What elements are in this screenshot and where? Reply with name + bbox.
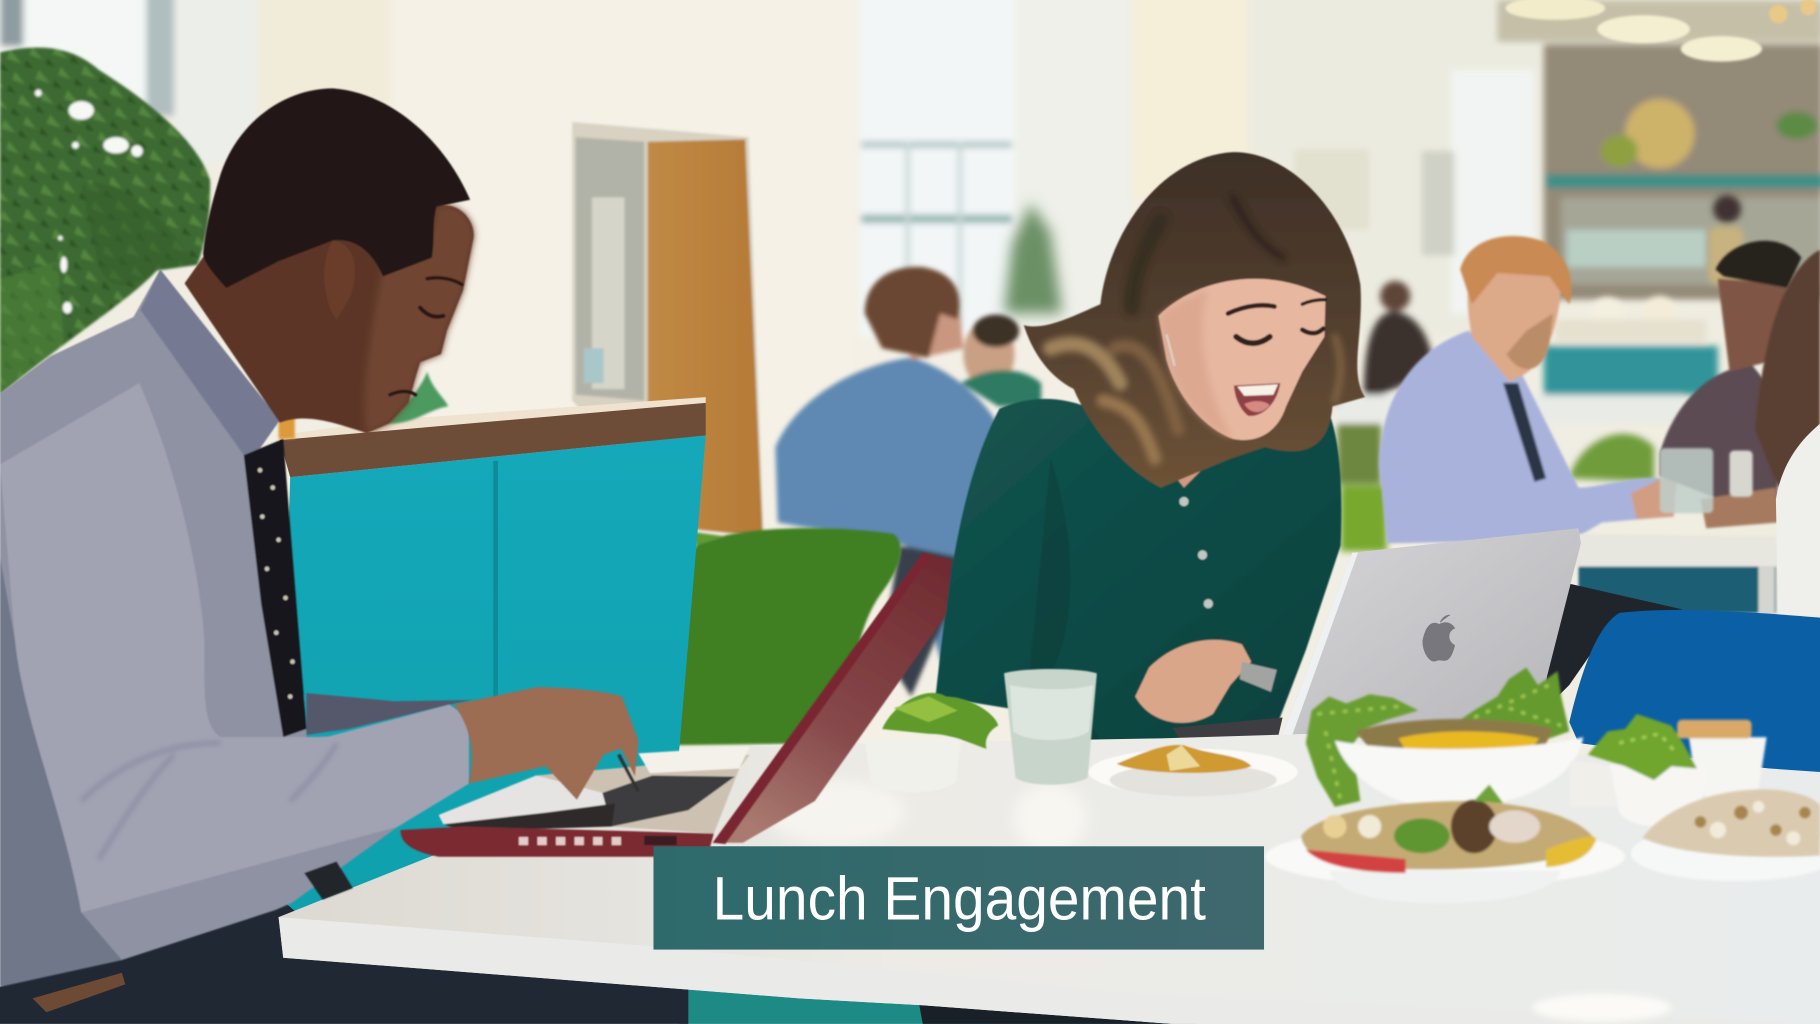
lettuce flecks xyxy=(1317,685,1561,801)
window xyxy=(859,0,1016,337)
teal cabinet xyxy=(276,397,706,923)
water glass xyxy=(1004,669,1097,785)
right plate with food xyxy=(1631,789,1820,881)
background man in blue shirt xyxy=(775,267,1041,697)
table rim xyxy=(279,917,1820,1024)
hair xyxy=(203,88,470,288)
sleeve folds xyxy=(81,743,337,859)
bowl food xyxy=(1356,719,1553,749)
hand with fork xyxy=(1135,640,1277,723)
face xyxy=(1158,279,1326,440)
laptop deck xyxy=(439,755,750,834)
fern plant xyxy=(0,48,210,395)
title text: Lunch Engagement xyxy=(713,864,1206,933)
ceiling lights xyxy=(1505,0,1817,62)
title banner xyxy=(653,846,1264,950)
man with laptop xyxy=(0,88,474,987)
mouth xyxy=(1234,383,1280,416)
sleeve xyxy=(0,383,469,912)
small bowls right xyxy=(1570,714,1767,827)
apple logo xyxy=(1423,615,1454,661)
hair highlights xyxy=(1050,197,1341,459)
blue chair xyxy=(1544,580,1820,775)
small potted salad xyxy=(865,693,998,792)
earring xyxy=(1167,334,1175,366)
back wall mosaic and shelf xyxy=(1294,0,1820,314)
blouse xyxy=(936,399,1341,745)
red laptop xyxy=(400,553,952,857)
paper notebook xyxy=(638,746,750,773)
cheek shading xyxy=(1158,290,1233,439)
pen xyxy=(619,755,638,792)
table top xyxy=(279,734,1820,1024)
dark lower body behind laptop xyxy=(882,546,958,697)
shirt torso xyxy=(0,269,469,987)
woman laughing xyxy=(936,152,1365,745)
wooden counter top xyxy=(279,397,706,477)
hand xyxy=(454,687,638,800)
right background man in dark shirt xyxy=(1660,241,1801,528)
eye and lips xyxy=(390,278,462,395)
laptop red rim xyxy=(400,827,714,857)
right lettuce xyxy=(1457,668,1569,738)
hair xyxy=(1024,152,1365,488)
neck xyxy=(1161,389,1242,488)
face highlight xyxy=(365,205,474,433)
salad bowl xyxy=(1306,668,1583,810)
tie lower xyxy=(304,861,353,900)
left lettuce xyxy=(1306,694,1418,807)
collar xyxy=(140,269,280,463)
right background man with tie xyxy=(1379,236,1677,543)
neck and face xyxy=(185,197,474,433)
small plant on counter xyxy=(389,372,448,424)
buttons xyxy=(1179,497,1213,608)
eyebrows and eyes xyxy=(1228,300,1326,343)
sleeve shadow xyxy=(1027,459,1103,745)
shirt lower left xyxy=(0,557,122,987)
back table and glass xyxy=(1573,448,1778,615)
blurred indoor plant xyxy=(1004,203,1062,314)
laptop base xyxy=(1172,717,1283,752)
tie xyxy=(244,439,306,737)
navy trousers and floor under table xyxy=(0,894,1196,1024)
doorway xyxy=(572,122,764,536)
white bowl xyxy=(1335,737,1583,810)
silver laptop xyxy=(1172,528,1581,755)
front plate with food xyxy=(1265,785,1625,903)
green chair xyxy=(671,528,901,745)
background seated people right xyxy=(1335,195,1743,551)
right edge woman xyxy=(1755,250,1820,615)
centre plate xyxy=(1089,745,1298,796)
keyboard xyxy=(602,775,735,827)
ear xyxy=(324,240,355,319)
patterned shirt behind arm xyxy=(306,693,474,735)
